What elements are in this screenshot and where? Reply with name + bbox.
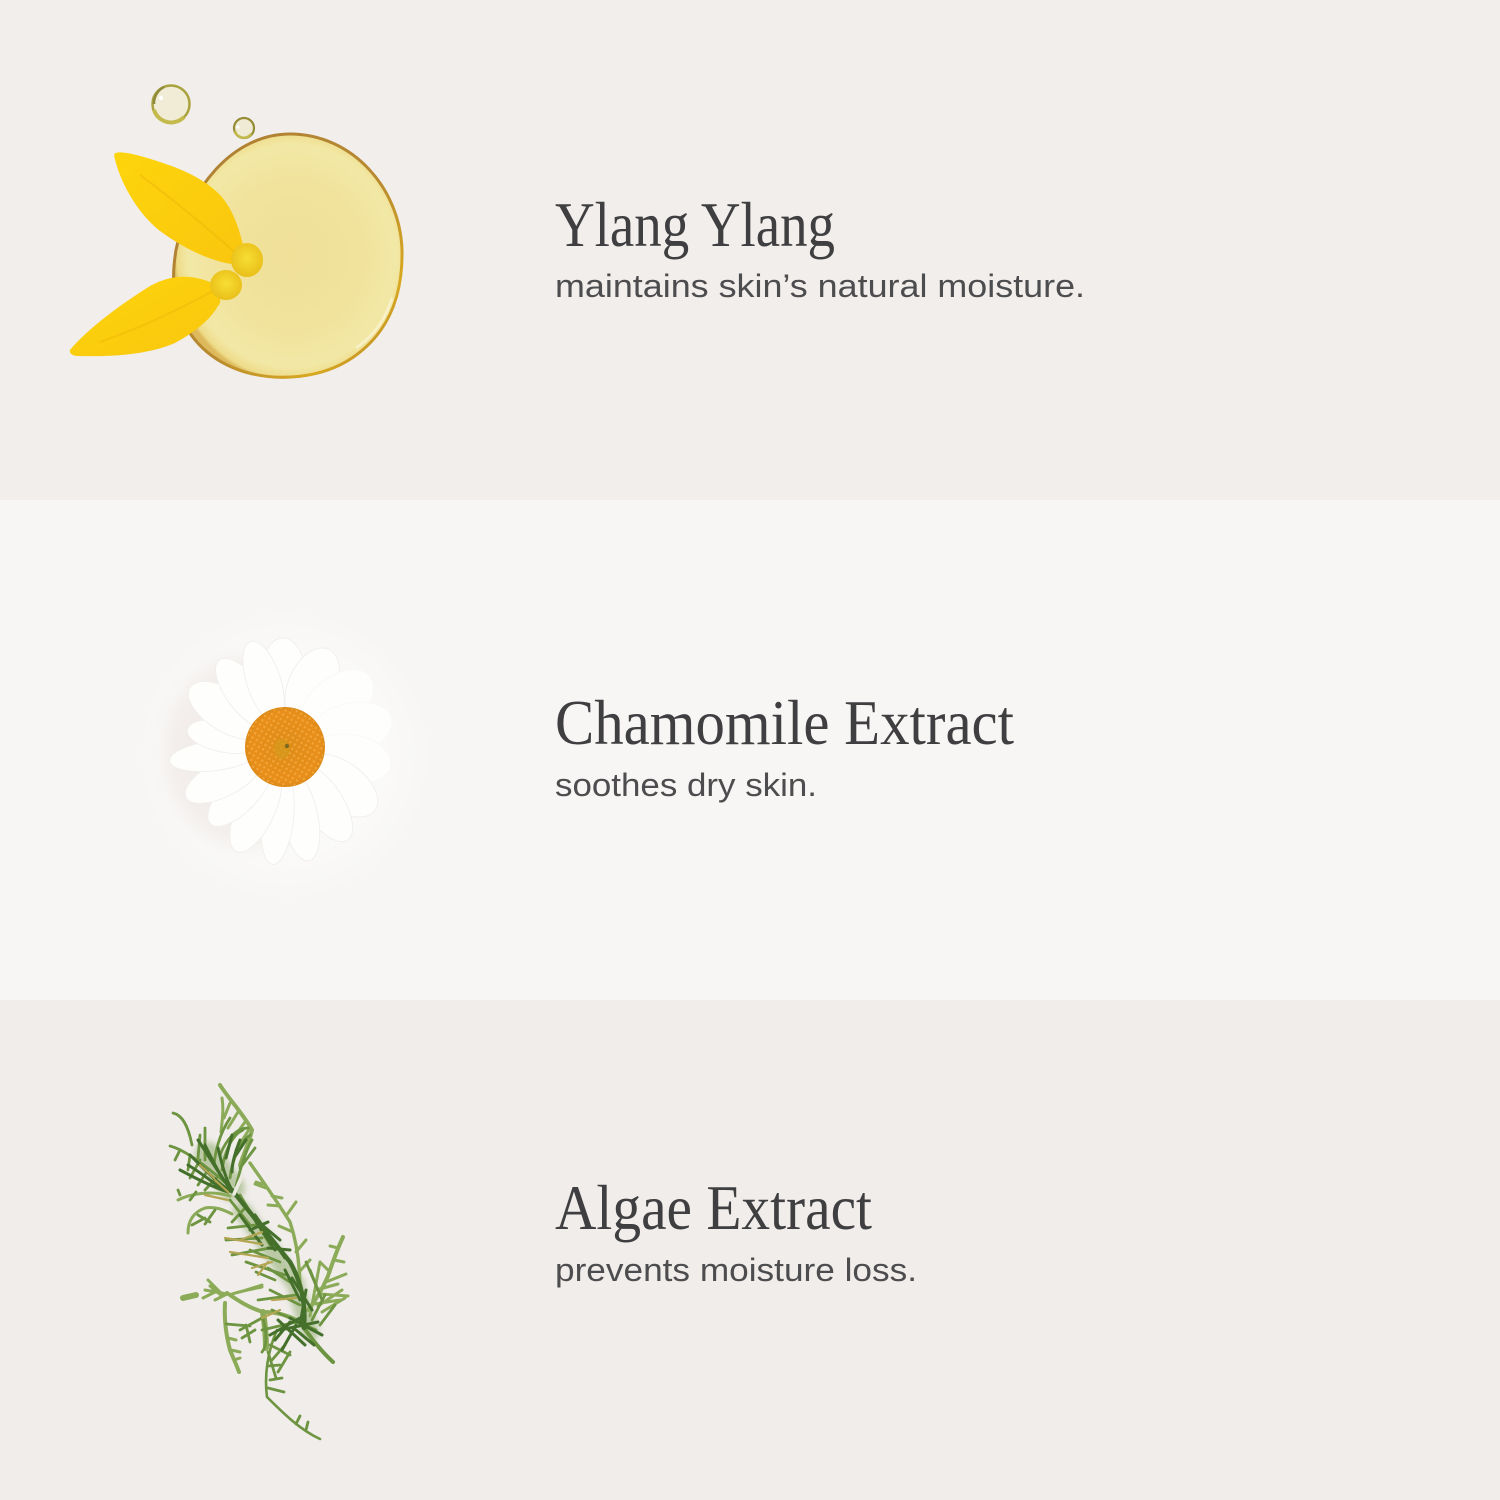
petals <box>168 636 398 866</box>
pale stem fleck <box>234 1176 242 1194</box>
oil bubble small <box>234 118 254 138</box>
flower disk <box>245 707 325 787</box>
dark stems and needles <box>180 1135 322 1350</box>
heading: Algae Extract: Algae Extract <box>555 1172 872 1243</box>
description: Algae Extract: prevents moisture loss. <box>555 1252 917 1288</box>
mid fronds <box>170 1113 335 1439</box>
panel: ylang ylang <box>0 0 1500 500</box>
oil bubble large <box>152 86 190 122</box>
upper petal <box>114 152 263 277</box>
icon: algae sprig <box>170 1085 348 1439</box>
icon: oil drop with yellow petals <box>70 86 402 377</box>
icon: chamomile flower <box>135 605 435 905</box>
heading: Chamomile Extract: Chamomile Extract <box>555 687 1014 758</box>
panel: chamomile <box>0 500 1500 1000</box>
description: Chamomile Extract: soothes dry skin. <box>555 767 817 803</box>
lower petal <box>70 270 242 356</box>
oil highlight rim <box>356 298 392 348</box>
description: Ylang Ylang: maintains skin’s natural moisture. <box>555 268 1085 304</box>
soft mass under fronds <box>208 1155 310 1332</box>
oil drop <box>174 134 402 377</box>
light fronds <box>178 1085 348 1372</box>
golden needles <box>200 1165 296 1318</box>
panel: algae <box>0 1000 1500 1500</box>
heading: Ylang Ylang: Ylang Ylang <box>555 189 835 260</box>
